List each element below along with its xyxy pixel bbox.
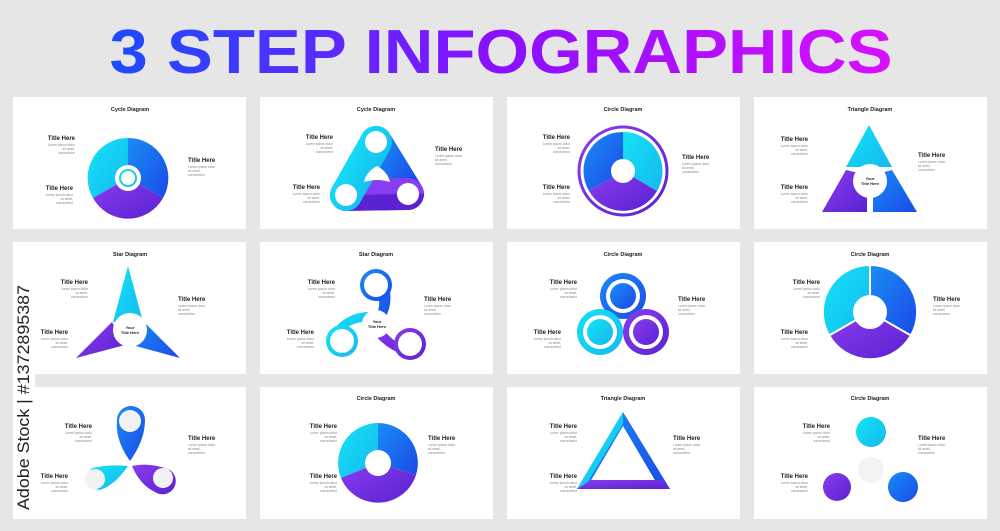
card 12: circle diagram: Lorem ipsum dolor [918,443,946,447]
card 5: star diagram: sit amet, [56,341,68,345]
card 1: cycle diagram: sit amet, [61,197,73,201]
card 8: circle diagram: Title Here [793,280,821,286]
card 10: circle diagram: sit amet, [325,435,337,439]
card 6: star diagram: Lorem ipsum dolor [287,337,315,341]
card 10: circle diagram: Title Here [428,436,456,442]
card 4: triangle diagram: sit amet, [918,164,931,168]
card 3: circle diagram: sit amet, [682,166,695,170]
card 6: star diagram: consectetur [318,295,336,299]
card 10: circle diagram: Lorem ipsum dolor [310,431,338,435]
card 8: circle diagram: Lorem ipsum dolor [793,287,821,291]
card 6: star diagram [260,242,493,374]
card 4: triangle diagram: consectetur [791,200,809,204]
card 11: triangle diagram: consectetur [560,489,578,493]
card 8: circle diagram: Lorem ipsum dolor [933,304,961,308]
card 3: circle diagram: sit amet, [558,146,570,150]
card 5: star diagram: consectetur [51,345,69,349]
card 2: cycle diagram: sit amet, [435,158,448,162]
card 8: circle diagram: Title Here [781,330,809,336]
card 3: circle diagram: Lorem ipsum dolor [543,192,571,196]
card 6: star diagram: Star Diagram [359,252,393,258]
card 2: cycle diagram: Lorem ipsum dolor [435,154,463,158]
card 8: circle diagram: consectetur [803,295,821,299]
card 11: triangle diagram: Triangle Diagram [601,396,645,402]
card 7: circle diagram: consectetur [678,312,696,316]
card 4: triangle diagram: Title Here [861,181,880,186]
card 1: cycle diagram: Title Here [46,186,74,192]
card 10: circle diagram: sit amet, [428,447,441,451]
card 10: circle diagram: Title Here [310,474,338,480]
card 4: triangle diagram: Title Here [918,153,946,159]
card 1: cycle diagram: Title Here [188,158,216,164]
card 11: triangle diagram: Lorem ipsum dolor [550,481,578,485]
card 8: circle diagram: sit amet, [933,308,946,312]
card 7: circle diagram: Lorem ipsum dolor [534,337,562,341]
card 5: star diagram: sit amet, [178,308,191,312]
card 10: circle diagram: consectetur [320,439,338,443]
card 5: star diagram: Lorem ipsum dolor [178,304,206,308]
card 11: triangle diagram: Title Here [673,436,701,442]
card 9: pin diagram: Lorem ipsum dolor [188,443,216,447]
card 6: star diagram: Lorem ipsum dolor [424,304,452,308]
card 8: circle diagram: sit amet, [796,341,808,345]
card 11: triangle diagram [507,387,740,519]
card 2: cycle diagram: Cycle Diagram [357,107,395,113]
card 2: cycle diagram: sit amet, [308,196,320,200]
card 3: circle diagram: Circle Diagram [604,107,643,113]
card 7: circle diagram: sit amet, [549,341,561,345]
card 2: cycle diagram: consectetur [316,150,334,154]
card 10: circle diagram: consectetur [428,451,446,455]
card 5: star diagram: Title Here [61,280,89,286]
card 3: circle diagram: Title Here [543,185,571,191]
card 5: star diagram [13,242,246,374]
watermark id: Adobe Stock | #1372895387 [14,285,33,510]
card 7: circle diagram: Title Here [678,297,706,303]
card 3: circle diagram [507,97,740,229]
card 5: star diagram: Lorem ipsum dolor [41,337,69,341]
card 1: cycle diagram: sit amet, [188,169,201,173]
card 2: cycle diagram: Title Here [293,185,321,191]
card 4: triangle diagram: Lorem ipsum dolor [918,160,946,164]
card 6: star diagram: sit amet, [302,341,314,345]
card 1: cycle diagram: Lorem ipsum dolor [46,193,74,197]
card 12: circle diagram: Lorem ipsum dolor [781,481,809,485]
card 6: star diagram: Title Here [424,297,452,303]
card 9: pin diagram: consectetur [75,439,93,443]
card 10: circle diagram: consectetur [320,489,338,493]
card 10: circle diagram: Lorem ipsum dolor [310,481,338,485]
card 10: circle diagram: Circle Diagram [357,396,396,402]
card 6: star diagram: Title Here [368,324,387,329]
card 6: star diagram: Lorem ipsum dolor [308,287,336,291]
card 6: star diagram: Title Here [287,330,315,336]
card 11: triangle diagram: sit amet, [673,447,686,451]
card 4: triangle diagram: Lorem ipsum dolor [781,192,809,196]
card 3: circle diagram: consectetur [553,200,571,204]
card 10: circle diagram [260,387,493,519]
card 1: cycle diagram: Cycle Diagram [111,107,149,113]
card 3: circle diagram: Lorem ipsum dolor [543,142,571,146]
card 1: cycle diagram: Lorem ipsum dolor [188,165,216,169]
card 9: pin diagram: consectetur [188,451,206,455]
card 12: circle diagram: sit amet, [918,447,931,451]
card 4: triangle diagram: sit amet, [796,148,808,152]
card 1: cycle diagram: consectetur [56,201,74,205]
card 2: cycle diagram: consectetur [435,162,453,166]
card 5: star diagram: Title Here [178,297,206,303]
card 3: circle diagram: consectetur [682,170,700,174]
card 2: cycle diagram: consectetur [303,200,321,204]
card 3: circle diagram: Lorem ipsum dolor [682,162,710,166]
card 5: star diagram: sit amet, [76,291,88,295]
card 1: cycle diagram: Title Here [48,136,76,142]
card 3: circle diagram: Title Here [543,135,571,141]
card 10: circle diagram: Title Here [310,424,338,430]
card 11: triangle diagram: Lorem ipsum dolor [673,443,701,447]
card 12: circle diagram: consectetur [813,439,831,443]
card 10: circle diagram: sit amet, [325,485,337,489]
card 5: star diagram: Star Diagram [113,252,147,258]
card 8: circle diagram: consectetur [933,312,951,316]
card 3: circle diagram: consectetur [553,150,571,154]
card 12: circle diagram: sit amet, [796,485,808,489]
card 2: cycle diagram [260,97,493,229]
card 9: pin diagram: Lorem ipsum dolor [41,481,69,485]
card 11: triangle diagram: sit amet, [565,485,577,489]
card 12: circle diagram: consectetur [918,451,936,455]
card 12: circle diagram: Lorem ipsum dolor [803,431,831,435]
card 10: circle diagram: Lorem ipsum dolor [428,443,456,447]
card 11: triangle diagram: Lorem ipsum dolor [550,431,578,435]
card 2: cycle diagram: Title Here [435,147,463,153]
card 7: circle diagram: sit amet, [678,308,691,312]
card 12: circle diagram: Title Here [918,436,946,442]
card 4: triangle diagram: Triangle Diagram [848,107,892,113]
card 11: triangle diagram: Title Here [550,474,578,480]
card 7: circle diagram: consectetur [544,345,562,349]
card 11: triangle diagram: consectetur [673,451,691,455]
card 8: circle diagram [754,242,987,374]
card 7: circle diagram: Lorem ipsum dolor [550,287,578,291]
card 6: star diagram: sit amet, [424,308,437,312]
card 9: pin diagram: sit amet, [80,435,92,439]
card 12: circle diagram: sit amet, [818,435,830,439]
card 1: cycle diagram: sit amet, [63,147,75,151]
card 4: triangle diagram [754,97,987,229]
card 4: triangle diagram: Title Here [781,137,809,143]
card 4: triangle diagram: Your [866,176,875,181]
card 4: triangle diagram: Lorem ipsum dolor [781,144,809,148]
card 6: star diagram: Your [373,319,382,324]
card 9: pin diagram: sit amet, [188,447,201,451]
card 1: cycle diagram: consectetur [188,173,206,177]
card 12: circle diagram [754,387,987,519]
card 4: triangle diagram: Title Here [781,185,809,191]
card 3: circle diagram: sit amet, [558,196,570,200]
card 8: circle diagram: Title Here [933,297,961,303]
card 9: pin diagram: Title Here [65,424,93,430]
card 2: cycle diagram: Title Here [306,135,334,141]
card 5: star diagram: consectetur [71,295,89,299]
card 12: circle diagram: Title Here [803,424,831,430]
card 9: pin diagram: consectetur [51,489,69,493]
card 5: star diagram: Title Here [41,330,69,336]
card 7: circle diagram: Lorem ipsum dolor [678,304,706,308]
card 8: circle diagram: Circle Diagram [851,252,890,258]
card 9: pin diagram [13,387,246,519]
card 2: cycle diagram: sit amet, [321,146,333,150]
card 6: star diagram: consectetur [424,312,442,316]
card 7: circle diagram: Title Here [550,280,578,286]
card 7: circle diagram: Title Here [534,330,562,336]
card 8: circle diagram: Lorem ipsum dolor [781,337,809,341]
card 4: triangle diagram: consectetur [918,168,936,172]
card 1: cycle diagram: Lorem ipsum dolor [48,143,76,147]
card 3: circle diagram: Title Here [682,155,710,161]
card 1: cycle diagram: consectetur [58,151,76,155]
card 2: cycle diagram: Lorem ipsum dolor [306,142,334,146]
card 6: star diagram: sit amet, [323,291,335,295]
card 5: star diagram: Title Here [121,330,140,335]
card 9: pin diagram: Title Here [188,436,216,442]
card 7: circle diagram: sit amet, [565,291,577,295]
card 12: circle diagram: Title Here [781,474,809,480]
card 6: star diagram: Title Here [308,280,336,286]
card 7: circle diagram: consectetur [560,295,578,299]
card 12: circle diagram: Circle Diagram [851,396,890,402]
card 2: cycle diagram: Lorem ipsum dolor [293,192,321,196]
card 7: circle diagram: Circle Diagram [604,252,643,258]
card 11: triangle diagram: consectetur [560,439,578,443]
card 11: triangle diagram: Title Here [550,424,578,430]
title: 3 STEP INFOGRAPHICS [110,18,892,87]
card 1: cycle diagram [13,97,246,229]
card 4: triangle diagram: sit amet, [796,196,808,200]
card 8: circle diagram: consectetur [791,345,809,349]
card 6: star diagram: consectetur [297,345,315,349]
card 5: star diagram: consectetur [178,312,196,316]
card 5: star diagram: Lorem ipsum dolor [61,287,89,291]
card 12: circle diagram: consectetur [791,489,809,493]
card 5: star diagram: Your [126,325,135,330]
card 7: circle diagram [507,242,740,374]
card 9: pin diagram: Title Here [41,474,69,480]
card 9: pin diagram: sit amet, [56,485,68,489]
card 8: circle diagram: sit amet, [808,291,820,295]
card 11: triangle diagram: sit amet, [565,435,577,439]
card 9: pin diagram: Lorem ipsum dolor [65,431,93,435]
card 4: triangle diagram: consectetur [791,152,809,156]
